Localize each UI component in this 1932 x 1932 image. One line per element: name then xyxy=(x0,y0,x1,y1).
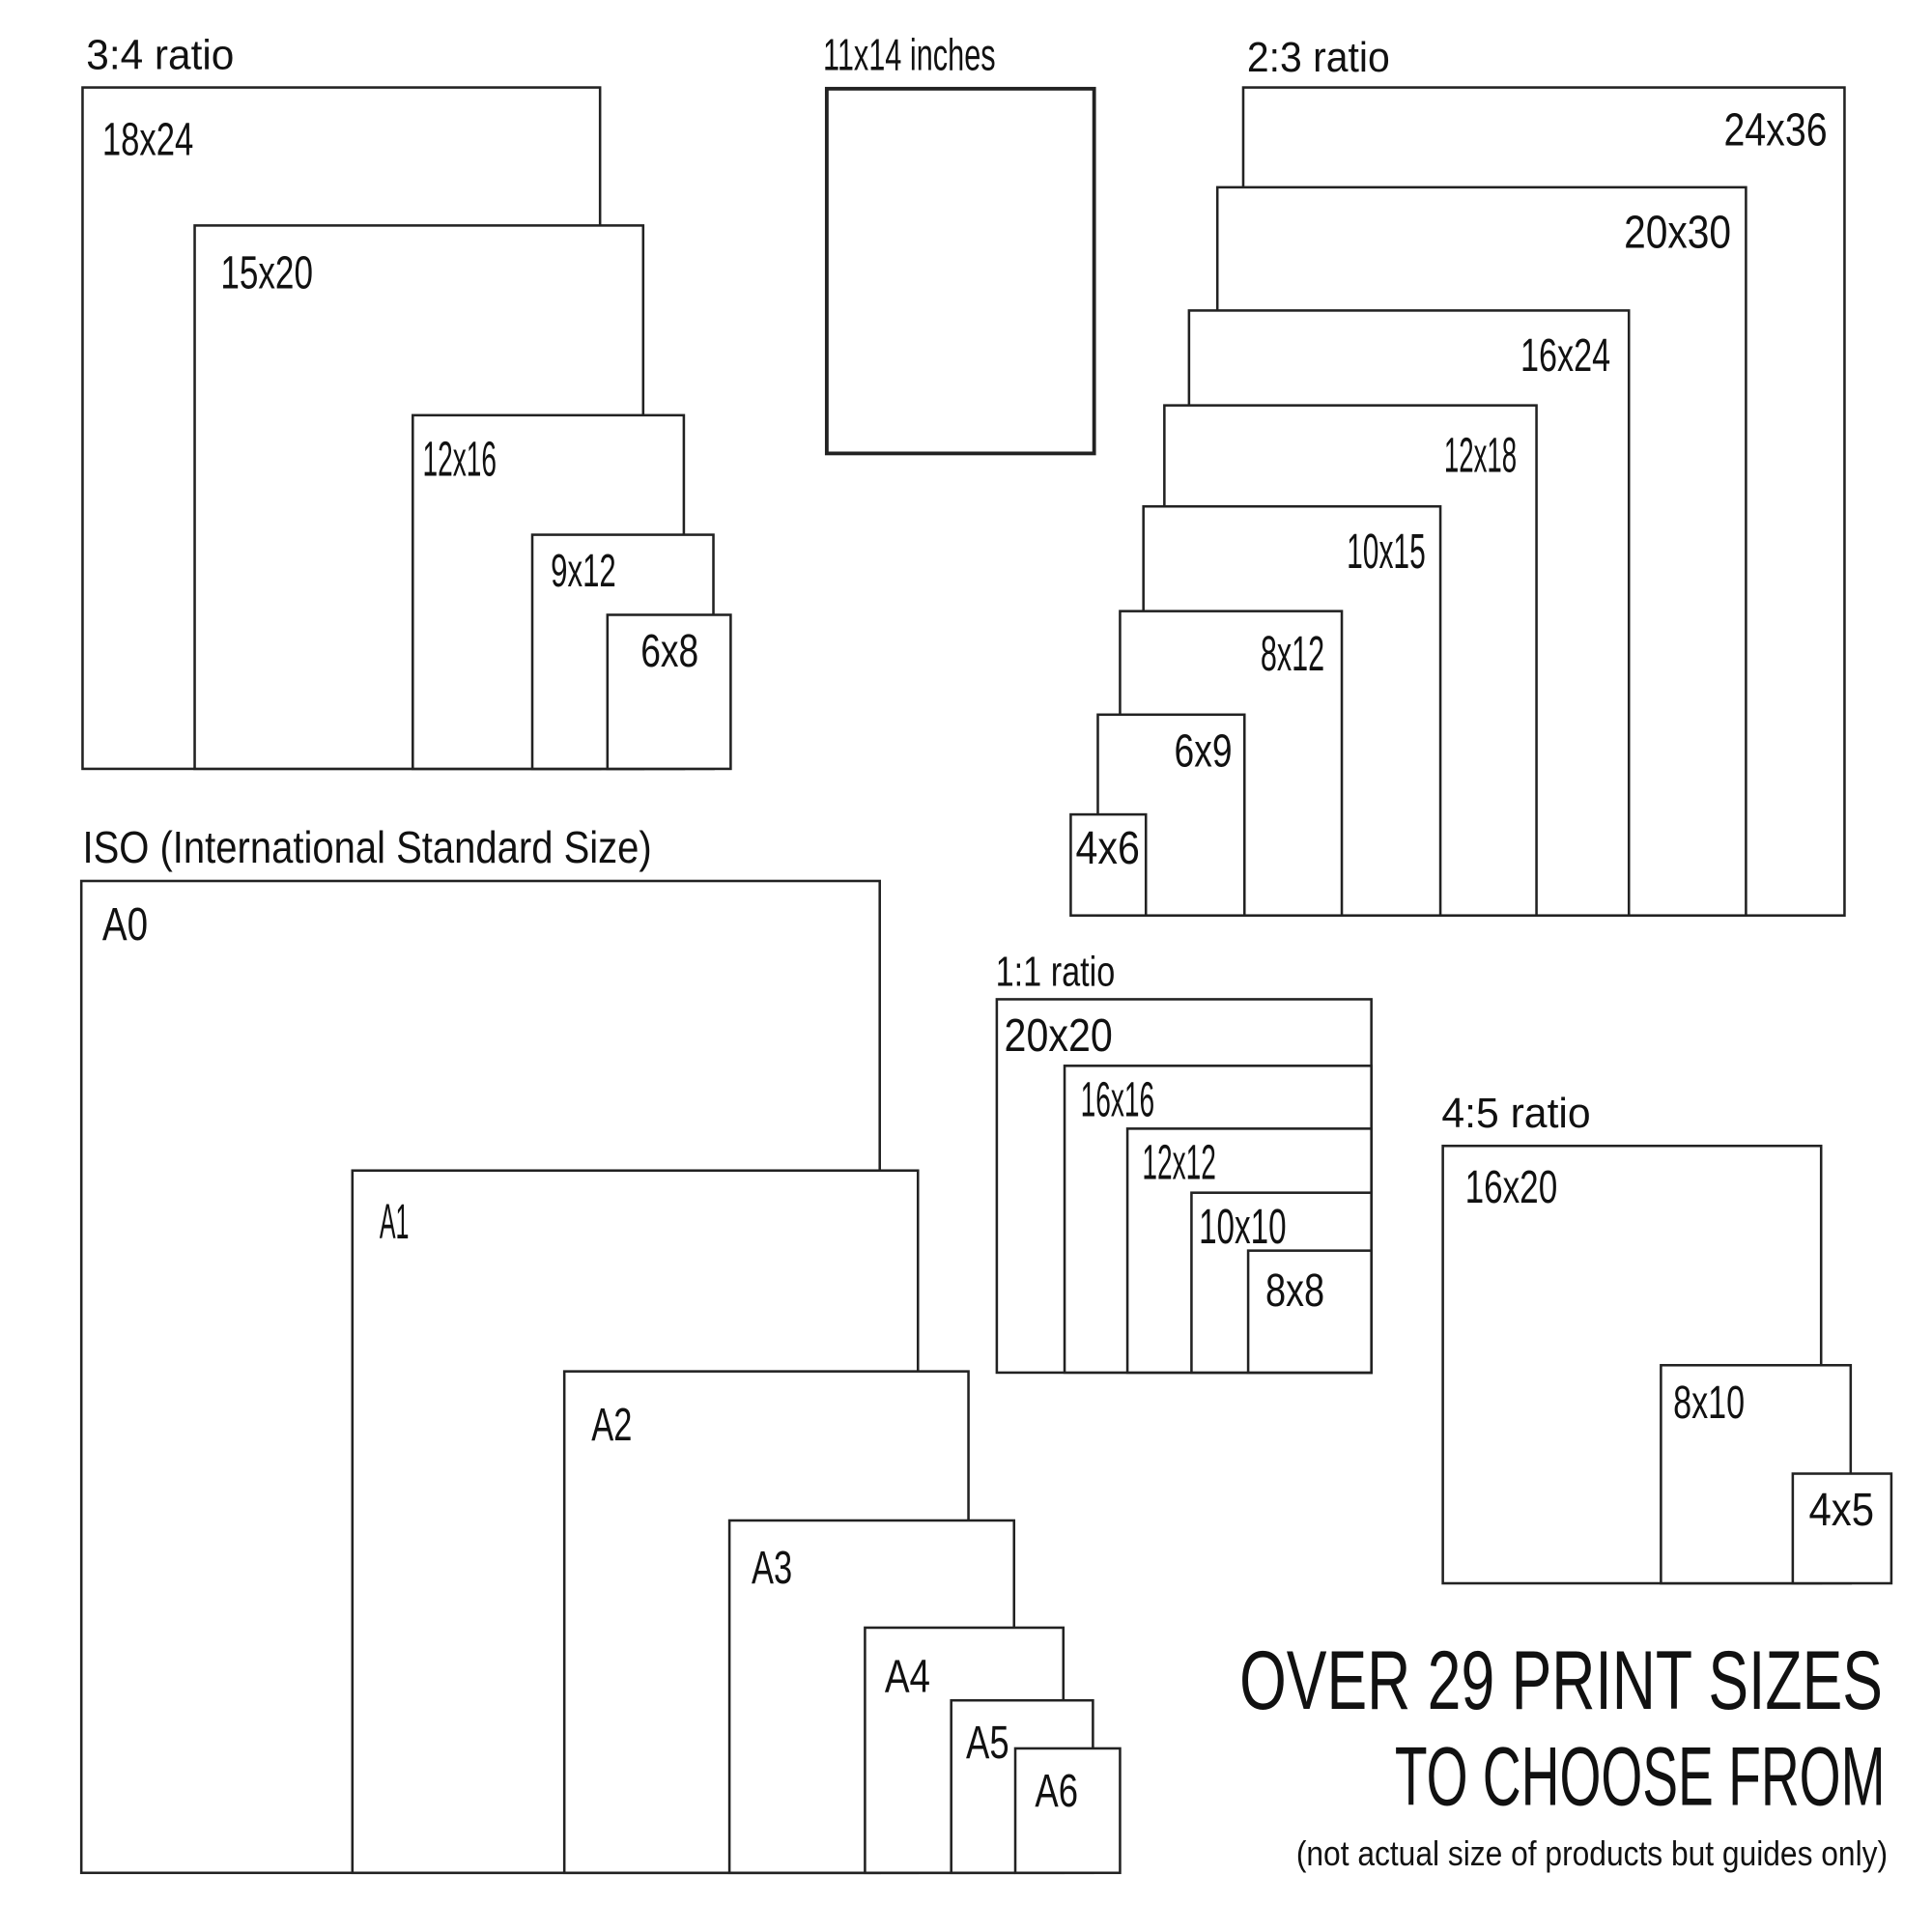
frame 16x24 xyxy=(1189,310,1629,916)
frame 20x30 xyxy=(1217,187,1746,916)
frame 8x12: 8x12 xyxy=(1261,626,1324,681)
frame 8x10: 8x10 xyxy=(1673,1377,1745,1429)
panel: 3:4 ratio xyxy=(82,32,730,769)
frame A1 xyxy=(353,1171,918,1873)
frame A4: A4 xyxy=(885,1650,930,1702)
heading: 4:5 ratio: 4:5 ratio xyxy=(1441,1091,1591,1137)
frame A4 xyxy=(865,1628,1064,1873)
panel: 11x14 inches xyxy=(823,30,1094,453)
frame 16x16: 16x16 xyxy=(1081,1072,1154,1127)
text block: tagline xyxy=(1239,1634,1888,1873)
panel: 4:5 ratio xyxy=(1441,1091,1891,1583)
heading: 1:1 ratio: 1:1 ratio xyxy=(996,949,1115,995)
frame 8x12 xyxy=(1120,611,1342,916)
heading: 11x14 inches: 11x14 inches xyxy=(823,30,996,80)
frame A2 xyxy=(564,1372,969,1873)
frame 4x6: 4x6 xyxy=(1076,822,1140,874)
frame 10x10: 10x10 xyxy=(1199,1199,1287,1254)
frame A5: A5 xyxy=(966,1717,1009,1769)
heading: 3:4 ratio: 3:4 ratio xyxy=(86,32,234,78)
frame 9x12 xyxy=(532,535,714,769)
frame 10x15 xyxy=(1144,506,1440,916)
frame 20x30: 20x30 xyxy=(1624,206,1731,258)
frame 24x36: 24x36 xyxy=(1723,104,1828,156)
frame A1: A1 xyxy=(380,1194,409,1249)
frame 16x16 xyxy=(1065,1065,1372,1373)
frame 12x12 xyxy=(1127,1128,1372,1373)
frame 4x5: 4x5 xyxy=(1808,1484,1874,1536)
frame 4x6 xyxy=(1070,814,1146,916)
frame 12x16: 12x16 xyxy=(423,431,497,486)
frame A5 xyxy=(952,1700,1093,1873)
panel: ISO sizes xyxy=(81,822,1120,1873)
frame 24x36 xyxy=(1243,88,1844,916)
frame 10x15: 10x15 xyxy=(1347,524,1426,579)
frame 16x24: 16x24 xyxy=(1520,329,1610,382)
frame 6x9 xyxy=(1097,715,1244,916)
frame A0 xyxy=(81,881,880,1873)
frame A6 xyxy=(1015,1748,1120,1873)
frame 4x5 xyxy=(1793,1474,1891,1583)
frame 8x8 xyxy=(1248,1251,1372,1373)
frame 9x12: 9x12 xyxy=(551,545,616,597)
frame A0: A0 xyxy=(102,898,148,951)
frame A6: A6 xyxy=(1035,1765,1078,1817)
frame 11x14 xyxy=(827,89,1094,453)
frame 18x24: 18x24 xyxy=(102,114,193,166)
frame 20x20 xyxy=(997,999,1372,1373)
frame 15x20 xyxy=(195,225,643,769)
frame 12x16 xyxy=(412,415,684,769)
panel: 2:3 ratio xyxy=(1070,35,1844,916)
panel: 1:1 ratio xyxy=(996,949,1372,1373)
frame 6x8: 6x8 xyxy=(640,625,698,677)
frame A3: A3 xyxy=(752,1542,792,1594)
heading: ISO: ISO (International Standard Size) xyxy=(82,822,652,872)
frame 10x10 xyxy=(1191,1193,1372,1373)
frame 20x20: 20x20 xyxy=(1005,1009,1113,1062)
frame 12x12: 12x12 xyxy=(1142,1135,1216,1190)
frame 16x20: 16x20 xyxy=(1465,1161,1557,1213)
frame 8x8: 8x8 xyxy=(1265,1264,1324,1317)
frame 15x20: 15x20 xyxy=(220,246,313,298)
frame 8x10 xyxy=(1661,1365,1851,1583)
frame 12x18: 12x18 xyxy=(1444,428,1517,483)
heading: 2:3 ratio: 2:3 ratio xyxy=(1247,35,1390,81)
frame A2: A2 xyxy=(591,1399,632,1451)
frame 6x9: 6x9 xyxy=(1175,724,1233,777)
frame 6x8 xyxy=(608,614,730,769)
frame 12x18 xyxy=(1164,406,1537,916)
frame 18x24 xyxy=(82,88,600,769)
frame A3 xyxy=(729,1520,1014,1873)
frame 16x20 xyxy=(1443,1146,1821,1583)
